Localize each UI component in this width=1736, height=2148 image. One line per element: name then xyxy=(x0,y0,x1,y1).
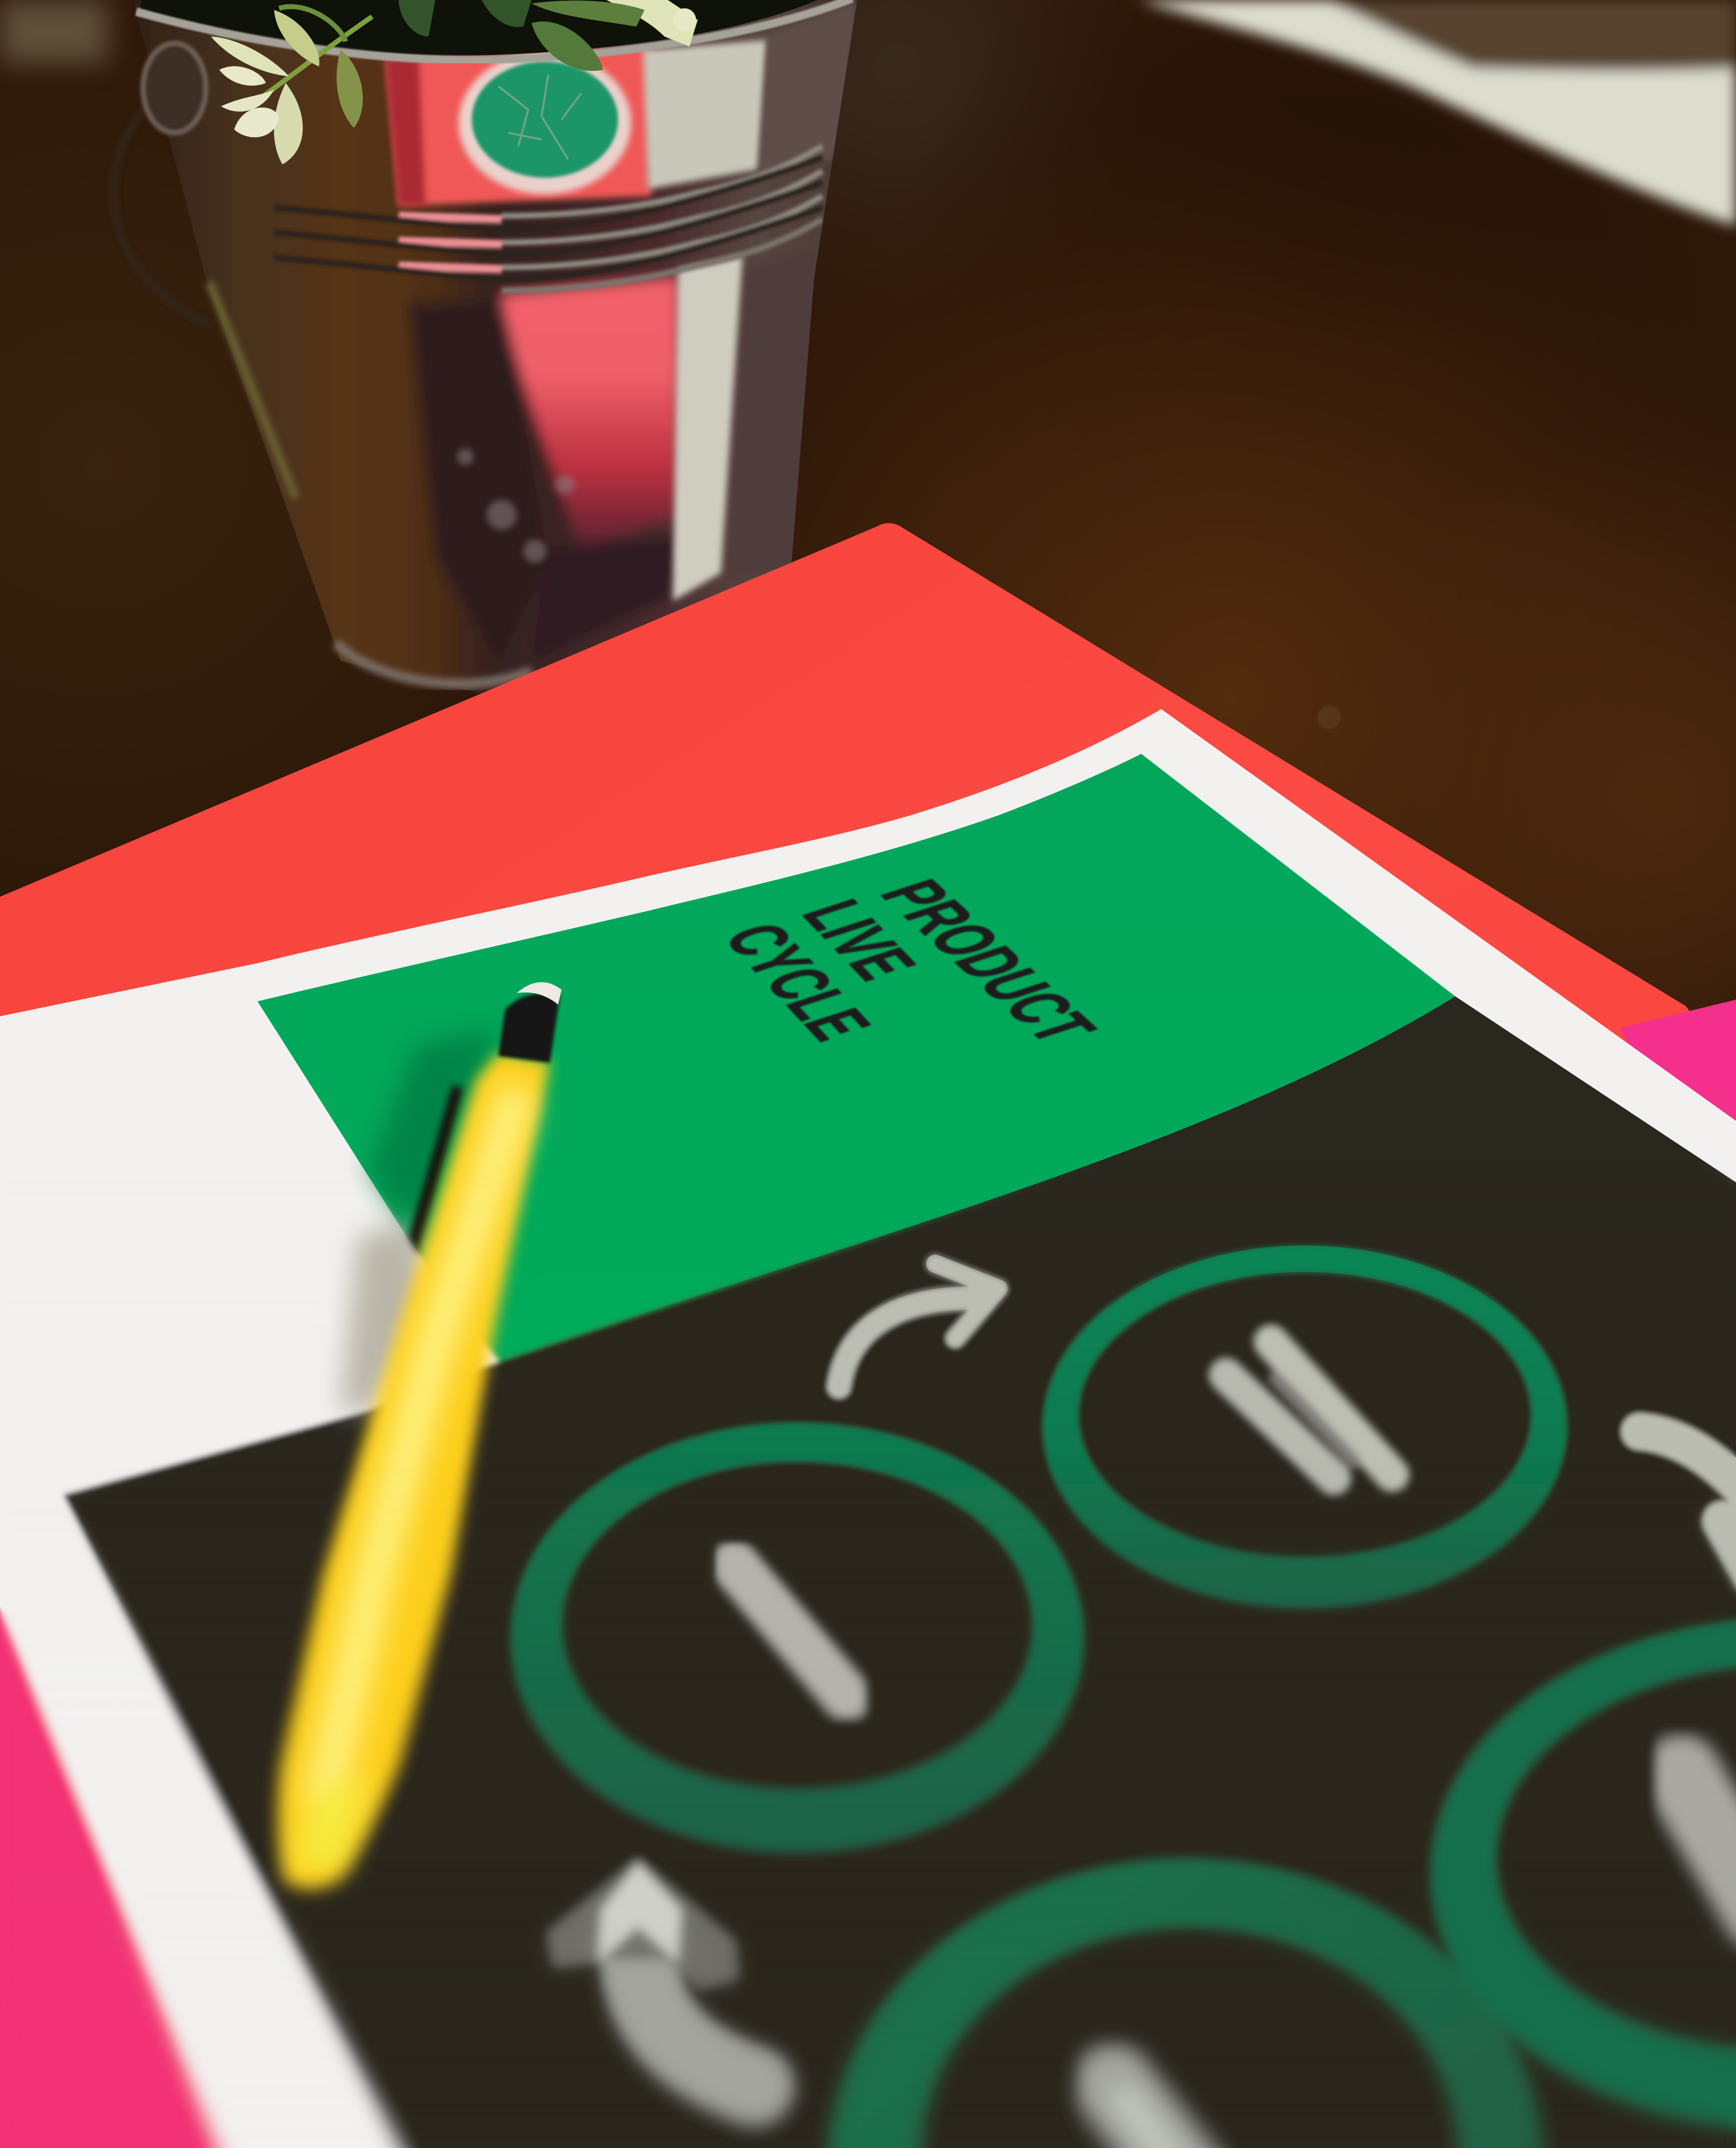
handle ear xyxy=(143,43,206,133)
blurred label: top stage xyxy=(1226,1342,1392,1478)
ring: top stage xyxy=(1043,1245,1567,1608)
pencil highlight xyxy=(326,1105,513,1794)
blurred label: bottom stage xyxy=(1113,2084,1223,2148)
red reflection lower xyxy=(502,279,678,548)
blurred label: right stage xyxy=(1681,1773,1736,1910)
blurred cloth at upper right xyxy=(1138,0,1736,226)
bucket side highlight xyxy=(209,282,296,498)
dark mottled column xyxy=(409,302,548,664)
white reflection lower xyxy=(673,256,743,601)
arrow: lower left xyxy=(552,1863,754,2086)
depth of field blur: medium xyxy=(0,523,1736,2148)
blurred label: left stage xyxy=(734,1564,847,1697)
bucket dents xyxy=(457,449,575,563)
soil xyxy=(141,0,818,55)
pencil shadow on paper xyxy=(341,1220,435,1412)
white reflection upper xyxy=(643,40,768,189)
bucket bottom rim xyxy=(336,643,531,684)
plant sprig right xyxy=(399,0,698,71)
bucket ridges xyxy=(274,146,822,290)
ring: right stage xyxy=(1432,1619,1736,2127)
pink folder right xyxy=(1620,1000,1736,1262)
sheet group: paper stack and printout xyxy=(0,523,1736,2148)
shadow on green beside pencil xyxy=(369,1026,498,1237)
depth of field blur: soft xyxy=(0,523,1736,2148)
green title panel xyxy=(257,754,1455,1362)
title xyxy=(707,872,1114,1051)
title line: product: PRODUCT xyxy=(863,872,1114,1051)
depth of field blur: strong xyxy=(0,523,1736,2148)
maroon bottom xyxy=(531,535,681,661)
red shade left xyxy=(385,56,425,206)
pencil tip collar xyxy=(498,993,560,1063)
red folder xyxy=(0,523,1736,1660)
plant sprig left xyxy=(211,6,372,165)
pencil tip glow xyxy=(293,1777,369,1868)
title line: live: LIVE xyxy=(785,891,934,988)
white printout sheet xyxy=(0,709,1736,2148)
bucket handle wire xyxy=(113,111,211,326)
ring: left stage xyxy=(512,1423,1083,1852)
arrow: top xyxy=(839,1264,998,1387)
right mottled strip xyxy=(731,249,814,581)
pencil body xyxy=(279,1053,550,1887)
pencil clip xyxy=(409,1086,464,1255)
red reflection upper xyxy=(385,46,651,206)
right mottled upper xyxy=(761,0,857,174)
bucket rim xyxy=(136,0,852,60)
arrow: upper right xyxy=(1640,1431,1736,1574)
black diagram panel xyxy=(63,996,1736,2148)
blurred object at upper left xyxy=(0,0,108,63)
pencil xyxy=(279,982,561,1887)
green reflection xyxy=(458,52,631,194)
title line: cycle: CYCLE xyxy=(707,915,888,1048)
pink folder left xyxy=(0,1577,432,2148)
ring: bottom stage xyxy=(830,1860,1542,2148)
pencil eraser xyxy=(517,982,561,1005)
metal bucket xyxy=(113,0,864,714)
